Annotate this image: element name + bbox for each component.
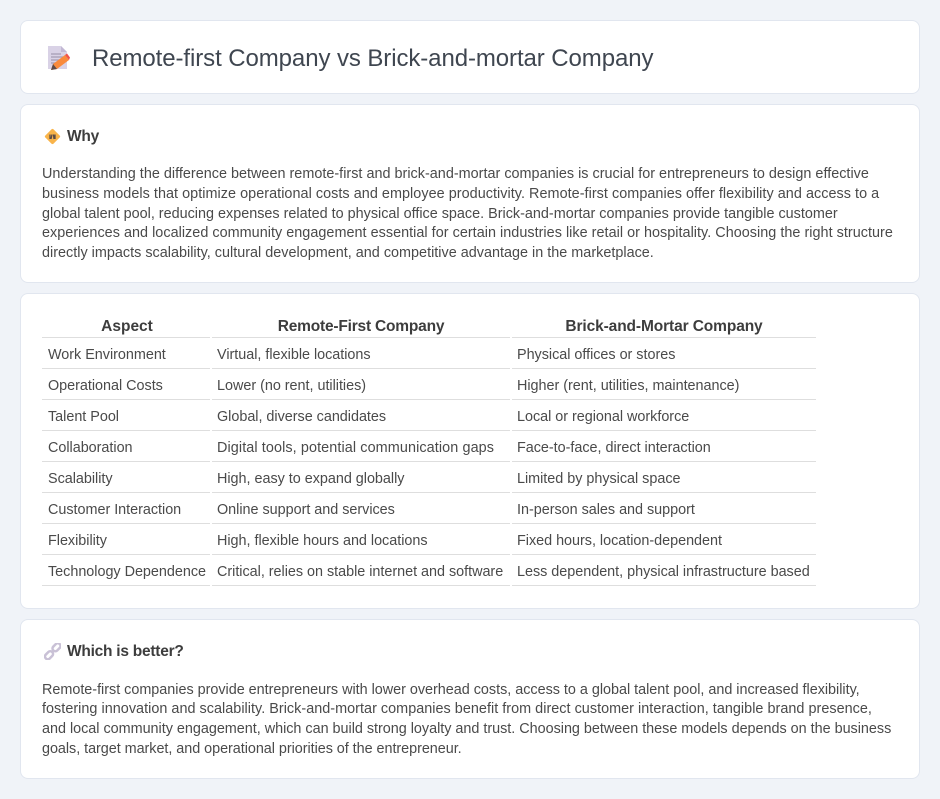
comparison table: Online support and services bbox=[217, 502, 395, 518]
comparison table: In-person sales and support bbox=[517, 502, 695, 518]
comparison table: Less dependent, physical infrastructure based bbox=[517, 564, 810, 580]
panel: comparison table bbox=[20, 293, 920, 609]
text block: why: Understanding the difference between remote-first and brick-and-mortar companies is crucial for entrepreneurs to design effective bbox=[42, 166, 869, 182]
text block: why bbox=[42, 166, 893, 261]
comparison table: Scalability bbox=[48, 471, 113, 487]
text block: which is better: fostering innovation and scalability. Brick-and-mortar companies benefit from direct customer interaction, tangible brand presence, bbox=[42, 701, 872, 717]
heading: which is better: Which is better? bbox=[67, 643, 184, 660]
comparison table: Talent Pool bbox=[48, 409, 119, 425]
comparison table: Face-to-face, direct interaction bbox=[517, 440, 711, 456]
comparison table: Physical offices or stores bbox=[517, 347, 675, 363]
comparison table: Global, diverse candidates bbox=[217, 409, 386, 425]
icon: chain link bbox=[44, 643, 61, 660]
table header row: Brick-and-Mortar Company bbox=[565, 318, 763, 335]
text block: why: global talent pool, reducing expenses related to physical office space. Brick-and-mortar companies provide tangible customer bbox=[42, 206, 838, 222]
text block: which is better bbox=[42, 682, 891, 757]
comparison table: Operational Costs bbox=[48, 378, 163, 394]
text block: why: business models that optimize operational costs and employee productivity. Remote-first companies offer flexibility and access to a bbox=[42, 186, 879, 202]
comparison table: Local or regional workforce bbox=[517, 409, 689, 425]
comparison table: Higher (rent, utilities, maintenance) bbox=[517, 378, 739, 394]
comparison table: Collaboration bbox=[48, 440, 133, 456]
panel: why bbox=[20, 104, 920, 283]
table header row: Remote-First Company bbox=[278, 318, 444, 335]
comparison table: High, flexible hours and locations bbox=[217, 533, 428, 549]
table header row bbox=[101, 318, 763, 335]
comparison table: Work Environment bbox=[48, 347, 166, 363]
comparison table: Lower (no rent, utilities) bbox=[217, 378, 366, 394]
icon: orange diamond bbox=[44, 128, 60, 144]
comparison table: Fixed hours, location-dependent bbox=[517, 533, 722, 549]
text block: which is better: and local community engagement, which can build strong loyalty and trust. Choosing between these models depends on the business bbox=[42, 721, 891, 737]
comparison table: Digital tools, potential communication gaps bbox=[217, 440, 494, 456]
text block: why: directly impacts scalability, cultural development, and competitive advantage in the marketplace. bbox=[42, 245, 654, 261]
panel: which is better bbox=[20, 619, 920, 779]
comparison table bbox=[42, 318, 816, 586]
text block: which is better: Remote-first companies provide entrepreneurs with lower overhead costs, access to a global talent pool, and increased flexibility, bbox=[42, 682, 860, 698]
comparison table: Customer Interaction bbox=[48, 502, 181, 518]
table header row: Aspect bbox=[101, 318, 153, 335]
header card bbox=[20, 20, 920, 94]
text block: which is better: goals, target market, and operational priorities of the entrepreneur. bbox=[42, 741, 462, 757]
heading: why: Why bbox=[67, 128, 99, 145]
icon: document with pencil bbox=[48, 46, 70, 70]
text block: why: experiences and localized community engagement essential for certain industries like retail or hospitality. Choosing the right structure bbox=[42, 225, 893, 241]
title: Remote-first Company vs Brick-and-mortar Company bbox=[92, 45, 653, 72]
comparison table: Flexibility bbox=[48, 533, 107, 549]
comparison table: Critical, relies on stable internet and software bbox=[217, 564, 503, 580]
comparison table: Virtual, flexible locations bbox=[217, 347, 371, 363]
comparison table: Technology Dependence bbox=[48, 564, 206, 580]
comparison table: Limited by physical space bbox=[517, 471, 680, 487]
comparison table: High, easy to expand globally bbox=[217, 471, 404, 487]
